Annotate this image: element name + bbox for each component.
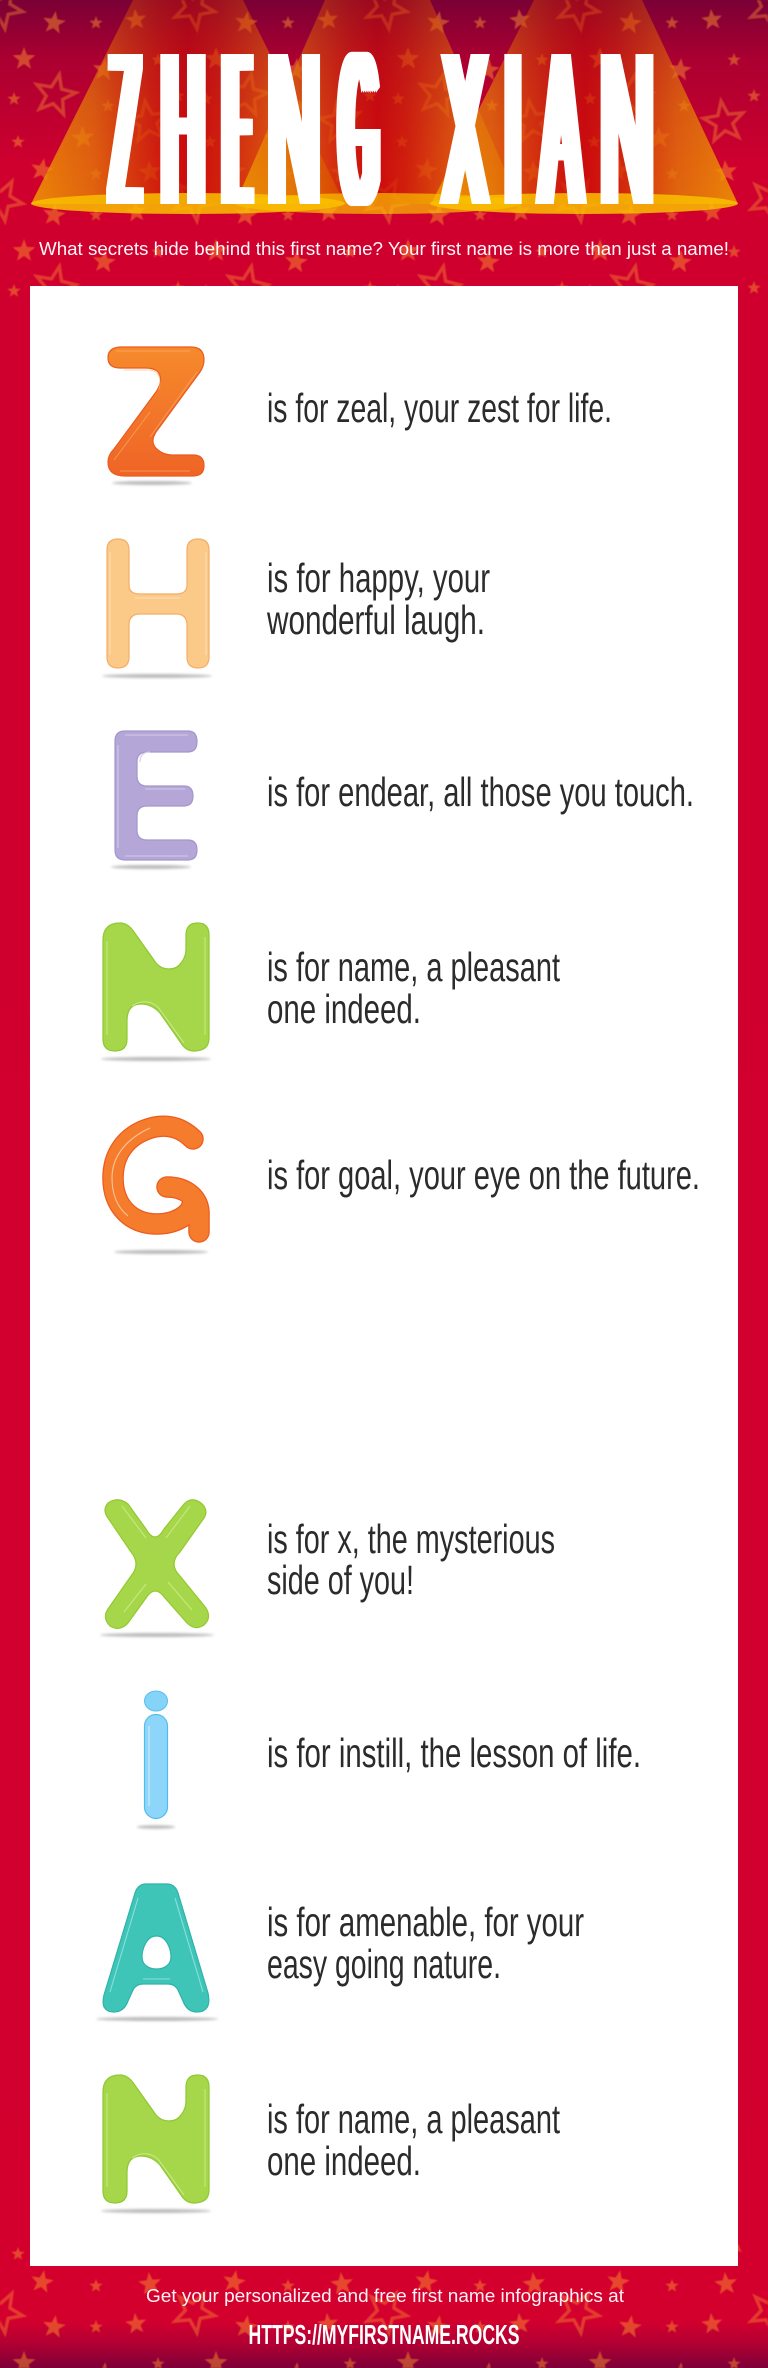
text: X: side of you!: [267, 1557, 414, 1603]
star pattern: bottom: [0, 2240, 768, 2368]
text: N: is for name, a pleasant: [267, 944, 560, 990]
icon: letter G: [112, 1126, 208, 1254]
text: Z: is for zeal, your zest for life.: [267, 385, 612, 431]
text: H: wonderful laugh.: [266, 597, 485, 643]
text: H: is for happy, your: [267, 555, 490, 601]
row: G: [112, 1126, 700, 1254]
row: N (second): [101, 2075, 560, 2213]
text: A: easy going nature.: [267, 1941, 501, 1987]
text: H: [266, 555, 490, 643]
text: N: [267, 944, 560, 1032]
icon: letter A: [96, 1884, 218, 2021]
icon: letter X: [100, 1500, 214, 1637]
title: [106, 10, 654, 240]
text: N: one indeed.: [267, 986, 421, 1032]
icon: letter N: [101, 923, 211, 1061]
row: E: [111, 731, 694, 869]
text: X: is for x, the mysterious: [267, 1516, 555, 1562]
subtitle: What secrets hide behind this first name? Your first name is more than just a name!: [39, 239, 729, 259]
row: Z: [108, 347, 612, 485]
spotlights: [31, 0, 738, 214]
footer line: Get your personalized and free first name infographics at: [146, 2286, 624, 2306]
icon: letter Z: [108, 347, 204, 485]
row: A: [96, 1884, 584, 2021]
row: N: [101, 923, 560, 1061]
text: X: [267, 1516, 555, 1603]
icon: letter H: [102, 539, 212, 678]
row: X: [100, 1500, 555, 1637]
icon: letter E: [111, 731, 197, 869]
text: A: is for amenable, for your: [267, 1899, 584, 1945]
icon: letter i: [137, 1691, 175, 1829]
text: N second: one indeed.: [267, 2138, 421, 2184]
text: N second: is for name, a pleasant: [267, 2096, 560, 2142]
row: I: [137, 1691, 641, 1829]
icon: letter N second: [101, 2075, 211, 2213]
text: N second: [267, 2096, 560, 2184]
star pattern: top: [0, 0, 768, 300]
footer url: HTTPS://MYFIRSTNAME.ROCKS: [248, 2319, 520, 2350]
row: H: [102, 539, 490, 678]
text: A: [267, 1899, 584, 1987]
white content panel: [30, 286, 738, 2266]
